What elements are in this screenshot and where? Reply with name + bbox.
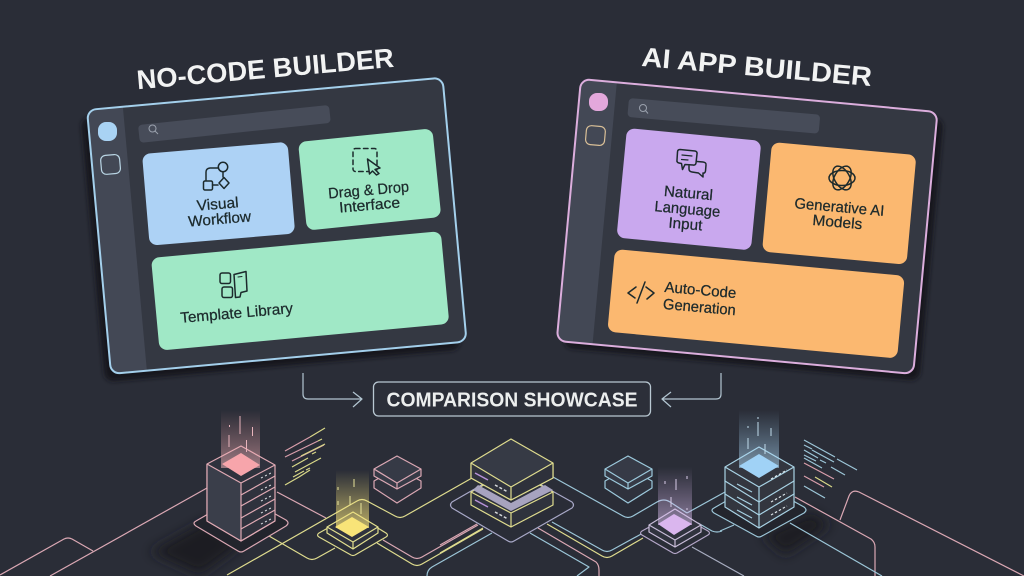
rack lights (261, 473, 271, 524)
layer 3 (725, 473, 794, 528)
icon: generative knot (829, 163, 855, 193)
data ticks (665, 476, 687, 510)
glowing top (658, 514, 692, 535)
card: natural language input: Natural (663, 183, 714, 204)
glow beam (658, 467, 692, 525)
card: natural language input: Language (654, 198, 721, 221)
chip: yellow (318, 470, 388, 556)
lower layer (471, 470, 553, 527)
sidebar icon: outlined square (100, 154, 121, 175)
glowing top (222, 453, 260, 476)
chip body (327, 512, 378, 549)
icon: chat bubbles (677, 150, 706, 177)
window frame (557, 79, 937, 374)
chip body (649, 509, 701, 547)
glowing top (739, 454, 779, 478)
heading: no-code builder: NO-CODE BUILDER (135, 43, 395, 95)
card: drag and drop: Drag & Drop (328, 179, 410, 203)
card: auto-code generation: Auto-Code (664, 279, 737, 302)
connector lines: teal (427, 477, 882, 576)
layer 1 (725, 447, 794, 502)
data ticks (748, 417, 771, 454)
card: drag and drop (298, 128, 441, 231)
label: comparison showcase: COMPARISON SHOWCASE (386, 388, 638, 412)
connector lines: pink (0, 488, 1024, 576)
window frame (87, 78, 467, 374)
data ticks (338, 479, 361, 514)
search bar (138, 105, 331, 143)
panel shadow (81, 86, 461, 382)
card: visual workflow: Visual (196, 194, 239, 215)
base plate (318, 514, 388, 556)
data ticks (229, 416, 252, 452)
card: generative ai models (762, 142, 916, 265)
server: pink tower (194, 410, 325, 552)
card: natural language input: Input (668, 215, 704, 235)
panel: ai app builder window (557, 79, 943, 381)
glow beam (739, 410, 779, 468)
card: visual workflow: Workflow (188, 208, 252, 231)
tower body (207, 446, 275, 541)
icon: code brackets (628, 282, 654, 303)
connector lines: yellow (227, 478, 643, 575)
server: blue stack (712, 410, 857, 537)
arrow: right panel to label (662, 373, 721, 407)
card: natural language input (616, 128, 761, 250)
small stack: teal (605, 456, 652, 503)
glowing slab (473, 485, 553, 511)
isometric network illustration (0, 410, 1024, 576)
sidebar icon: outlined square (585, 125, 606, 146)
card: template library: Template Library (180, 300, 294, 327)
base plate (194, 495, 288, 552)
card: generative ai models: Generative AI (794, 195, 885, 220)
heading: ai app builder: AI APP BUILDER (640, 42, 873, 92)
card: template library (151, 231, 449, 351)
code lines (285, 428, 325, 485)
layer 2 (725, 460, 794, 515)
card: visual workflow (142, 142, 295, 246)
status marks (475, 473, 488, 507)
glow beam (336, 470, 369, 528)
chip: purple (640, 467, 710, 554)
small stack: pink (374, 456, 421, 503)
sidebar icon: filled circle (589, 93, 608, 111)
arrow: left panel to label (303, 373, 362, 407)
glowing top (335, 517, 369, 537)
base plate (712, 482, 806, 537)
card: drag and drop: Interface (338, 194, 401, 217)
server: central yellow block (450, 439, 574, 542)
glow beam (221, 410, 260, 468)
icon: workflow (204, 162, 229, 190)
upper layer (471, 439, 553, 500)
panel: no-code builder window (81, 78, 467, 382)
base plate (450, 468, 574, 542)
icon: template grid (220, 272, 247, 298)
base plate (640, 514, 710, 554)
floor shadows (150, 512, 830, 575)
card: auto-code generation: Generation (662, 296, 736, 319)
panel shadow (564, 86, 943, 381)
icon: dashed box with cursor (353, 148, 380, 175)
card: auto-code generation (607, 249, 905, 359)
search bar (627, 98, 820, 134)
sidebar icon: filled circle (98, 122, 117, 141)
label: comparison showcase (374, 382, 650, 416)
card: generative ai models: Models (812, 212, 863, 233)
code lines (804, 440, 857, 498)
